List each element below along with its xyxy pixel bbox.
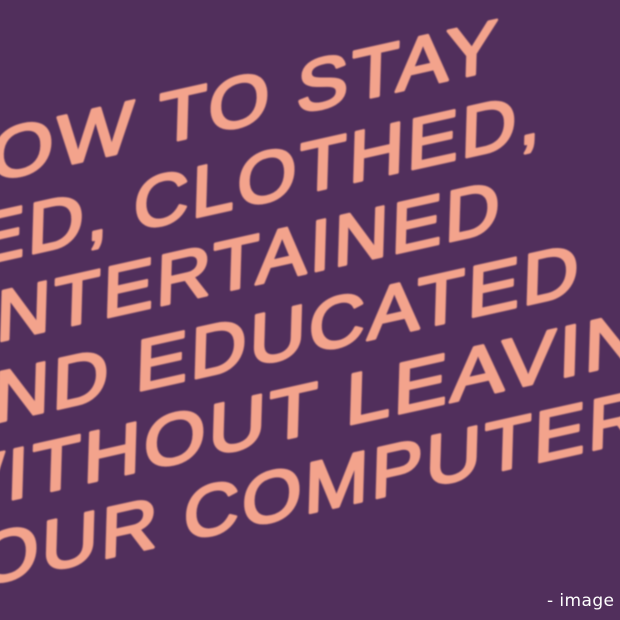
headline line 1: [0, 4, 502, 211]
headline line 4: EDUCATED: [135, 228, 583, 407]
headline line 2: [0, 76, 545, 294]
headline line 6: COMPUTER: [183, 374, 620, 557]
headline line 5: [0, 280, 620, 534]
headline line 4: [0, 228, 583, 451]
headline line 2: CLOTHED,: [133, 76, 545, 247]
headline line 6: [0, 374, 620, 615]
caption: - image: [547, 591, 614, 611]
headline line 1: TO: [158, 55, 274, 160]
headline line 1: STAY: [296, 4, 502, 130]
